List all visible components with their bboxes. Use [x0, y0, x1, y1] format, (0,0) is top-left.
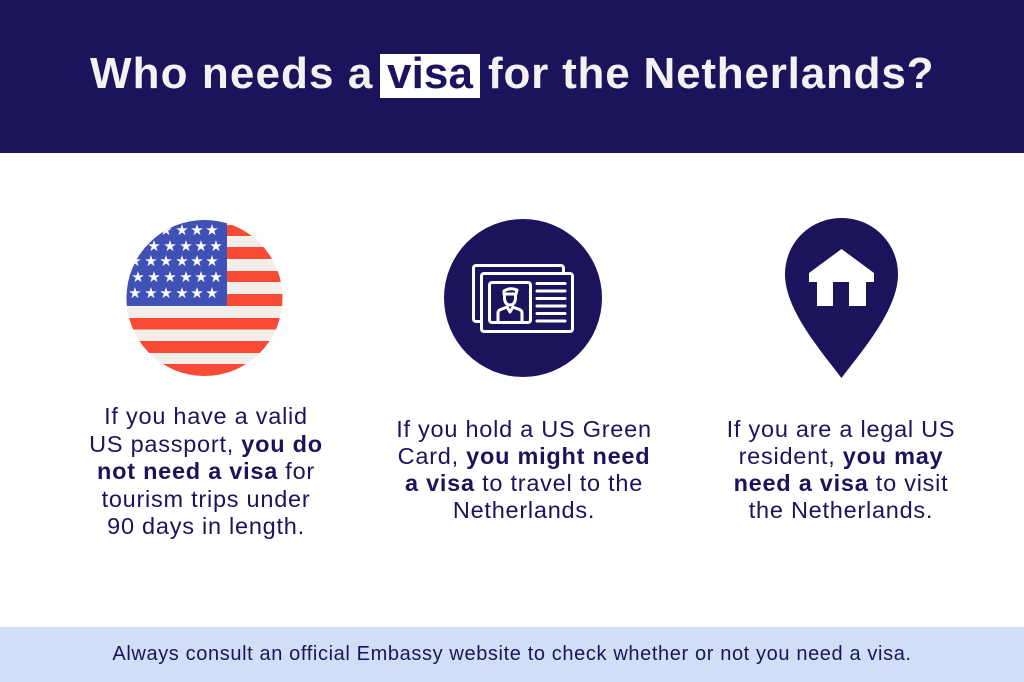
title: Who needs a — [90, 49, 373, 98]
text: legal resident: the Netherlands. — [749, 497, 933, 523]
title — [90, 49, 934, 98]
icon: US flag: ★ — [131, 268, 145, 286]
footer bar — [0, 627, 1024, 682]
text: legal resident: resident, you may — [739, 443, 943, 469]
icon: US flag: ★ — [144, 284, 158, 302]
footer note: Always consult an official Embassy website to check whether or not you need a visa. — [112, 643, 912, 665]
text: US passport — [89, 403, 323, 539]
icon: US flag: ★ — [159, 221, 173, 239]
text: Green Card: If you hold a US Green — [396, 416, 652, 442]
icon: US flag: ★ — [205, 284, 219, 302]
icon: US flag: ★ — [163, 268, 177, 286]
icon: US flag: ★ — [190, 284, 204, 302]
icon: US flag: ★ — [209, 237, 223, 255]
icon: US flag: ★ — [190, 252, 204, 270]
icon: US flag: ★ — [147, 268, 161, 286]
icon: US flag: ★ — [175, 284, 189, 302]
icon: US flag: ★ — [179, 268, 193, 286]
icon: US flag: ★ — [209, 268, 223, 286]
header banner — [0, 0, 1024, 153]
text: legal resident — [727, 416, 955, 523]
icon: US flag: ★ — [159, 284, 173, 302]
icon: US flag — [126, 220, 282, 376]
text: US passport: tourism trips under — [102, 486, 310, 512]
text: legal resident: If you are a legal US — [727, 416, 955, 442]
icon: US flag: ★ — [205, 221, 219, 239]
icon: US flag: ★ — [194, 268, 208, 286]
title: visa — [387, 49, 473, 98]
icon: US flag: ★ — [179, 237, 193, 255]
icon: US flag: ★ — [175, 252, 189, 270]
icon: US flag: ★ — [147, 237, 161, 255]
text: US passport: US passport, you do — [89, 430, 323, 456]
text: legal resident: need a visa to visit — [734, 470, 948, 496]
icon: map pin with house — [785, 218, 898, 378]
text: Green Card: Card, you might need — [398, 443, 650, 469]
icon: US flag: ★ — [190, 221, 204, 239]
icon: ID card in circle — [444, 219, 602, 377]
icon: US flag: ★ — [175, 221, 189, 239]
icon: US flag: ★ — [163, 237, 177, 255]
text: Green Card: Netherlands. — [453, 497, 595, 523]
title: for the Netherlands? — [488, 49, 934, 98]
icon: US flag: ★ — [194, 237, 208, 255]
icon: US flag: ★ — [128, 252, 142, 270]
icon: US flag: ★ — [205, 252, 219, 270]
text: US passport: 90 days in length. — [107, 513, 305, 539]
text: Green Card: a visa to travel to the — [405, 470, 643, 496]
text: US passport: not need a visa for — [97, 458, 315, 484]
icon: US flag: ★ — [159, 252, 173, 270]
icon: US flag: ★ — [128, 284, 142, 302]
text: US passport: If you have a valid — [104, 403, 308, 429]
text: Green Card — [396, 416, 652, 523]
icon: US flag: ★ — [144, 252, 158, 270]
